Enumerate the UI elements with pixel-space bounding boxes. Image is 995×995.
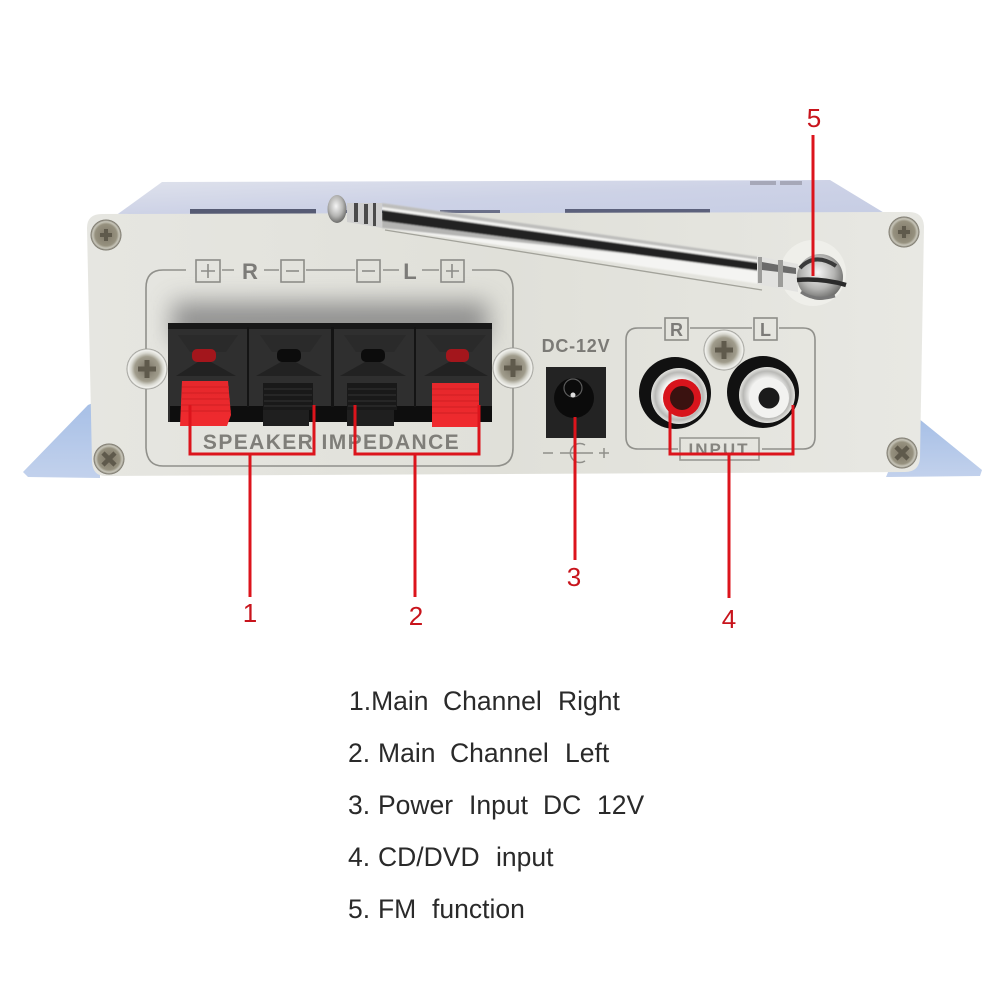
L box: L bbox=[760, 320, 771, 340]
callout 2 bracket bbox=[355, 405, 479, 597]
screw top left bbox=[90, 220, 122, 250]
number 5: 5 bbox=[807, 103, 821, 133]
number 3: 3 bbox=[567, 562, 581, 592]
legend item 5: FM bbox=[378, 894, 416, 924]
input label: INPUT bbox=[688, 440, 750, 459]
legend text bbox=[348, 686, 644, 924]
speaker frame bbox=[146, 270, 513, 466]
red indicator left bbox=[192, 349, 216, 362]
legend item 3: Power bbox=[378, 790, 453, 820]
legend item 3: Input bbox=[469, 790, 529, 820]
legend item 1: 1.Main bbox=[349, 686, 429, 716]
screw terminal left bbox=[126, 348, 168, 390]
screw top right bbox=[888, 216, 920, 248]
input frame bbox=[626, 328, 815, 449]
L box bbox=[754, 318, 777, 340]
black indicator bbox=[361, 349, 385, 362]
legend item 4: CD/DVD bbox=[378, 842, 480, 872]
shadow above terminals bbox=[172, 302, 488, 342]
speaker impedance label: SPEAKER IMPEDANCE bbox=[203, 431, 460, 454]
input label bbox=[680, 438, 759, 460]
legend item 5: 5. bbox=[348, 894, 370, 924]
legend item 4: input bbox=[496, 842, 554, 872]
legend item 3: 3. bbox=[348, 790, 370, 820]
number 4: 4 bbox=[722, 604, 736, 634]
black lever left bbox=[263, 383, 313, 426]
screw input bbox=[704, 330, 744, 370]
number 2: 2 bbox=[409, 601, 423, 631]
red indicator right bbox=[446, 349, 469, 362]
legend item 2: Main bbox=[378, 738, 435, 768]
L label: L bbox=[403, 259, 417, 284]
DC jack bbox=[546, 367, 606, 438]
speaker terminal block bbox=[168, 323, 492, 427]
legend item 2: Left bbox=[565, 738, 610, 768]
R box bbox=[665, 318, 688, 340]
antenna bbox=[328, 195, 846, 300]
callout 3 line bbox=[574, 417, 576, 560]
legend item 1: Channel bbox=[443, 686, 542, 716]
callout 5 line bbox=[812, 135, 814, 276]
RCA socket left bbox=[727, 356, 799, 428]
DC label: DC-12V bbox=[542, 336, 610, 356]
black lever right bbox=[347, 383, 397, 426]
red lever left bbox=[180, 381, 231, 426]
red lever right bbox=[432, 383, 479, 427]
top of amplifier case bbox=[115, 180, 886, 216]
callout 4 bracket bbox=[670, 405, 793, 598]
amplifier illustration bbox=[23, 180, 982, 478]
R box: R bbox=[670, 320, 683, 340]
legend item 1: Right bbox=[558, 686, 621, 716]
number 1: 1 bbox=[243, 598, 257, 628]
legend item 5: function bbox=[432, 894, 525, 924]
front panel bbox=[87, 212, 924, 476]
legend item 4: 4. bbox=[348, 842, 370, 872]
left mounting foot bbox=[23, 400, 100, 478]
speaker polarity markings bbox=[196, 260, 464, 282]
right mounting foot bbox=[886, 418, 982, 477]
antenna washer bbox=[780, 240, 846, 306]
legend item 3: 12V bbox=[597, 790, 644, 820]
black indicator bbox=[277, 349, 301, 362]
legend item 3: DC bbox=[543, 790, 581, 820]
screw bottom right bbox=[886, 438, 918, 468]
screw bottom left bbox=[94, 444, 124, 474]
legend item 2: Channel bbox=[450, 738, 549, 768]
callout 1 bracket bbox=[190, 405, 314, 597]
screw terminal right bbox=[492, 348, 534, 388]
power polarity symbol bbox=[543, 444, 609, 462]
RCA socket right bbox=[639, 357, 711, 429]
R label: R bbox=[242, 259, 258, 284]
legend item 2: 2. bbox=[348, 738, 370, 768]
